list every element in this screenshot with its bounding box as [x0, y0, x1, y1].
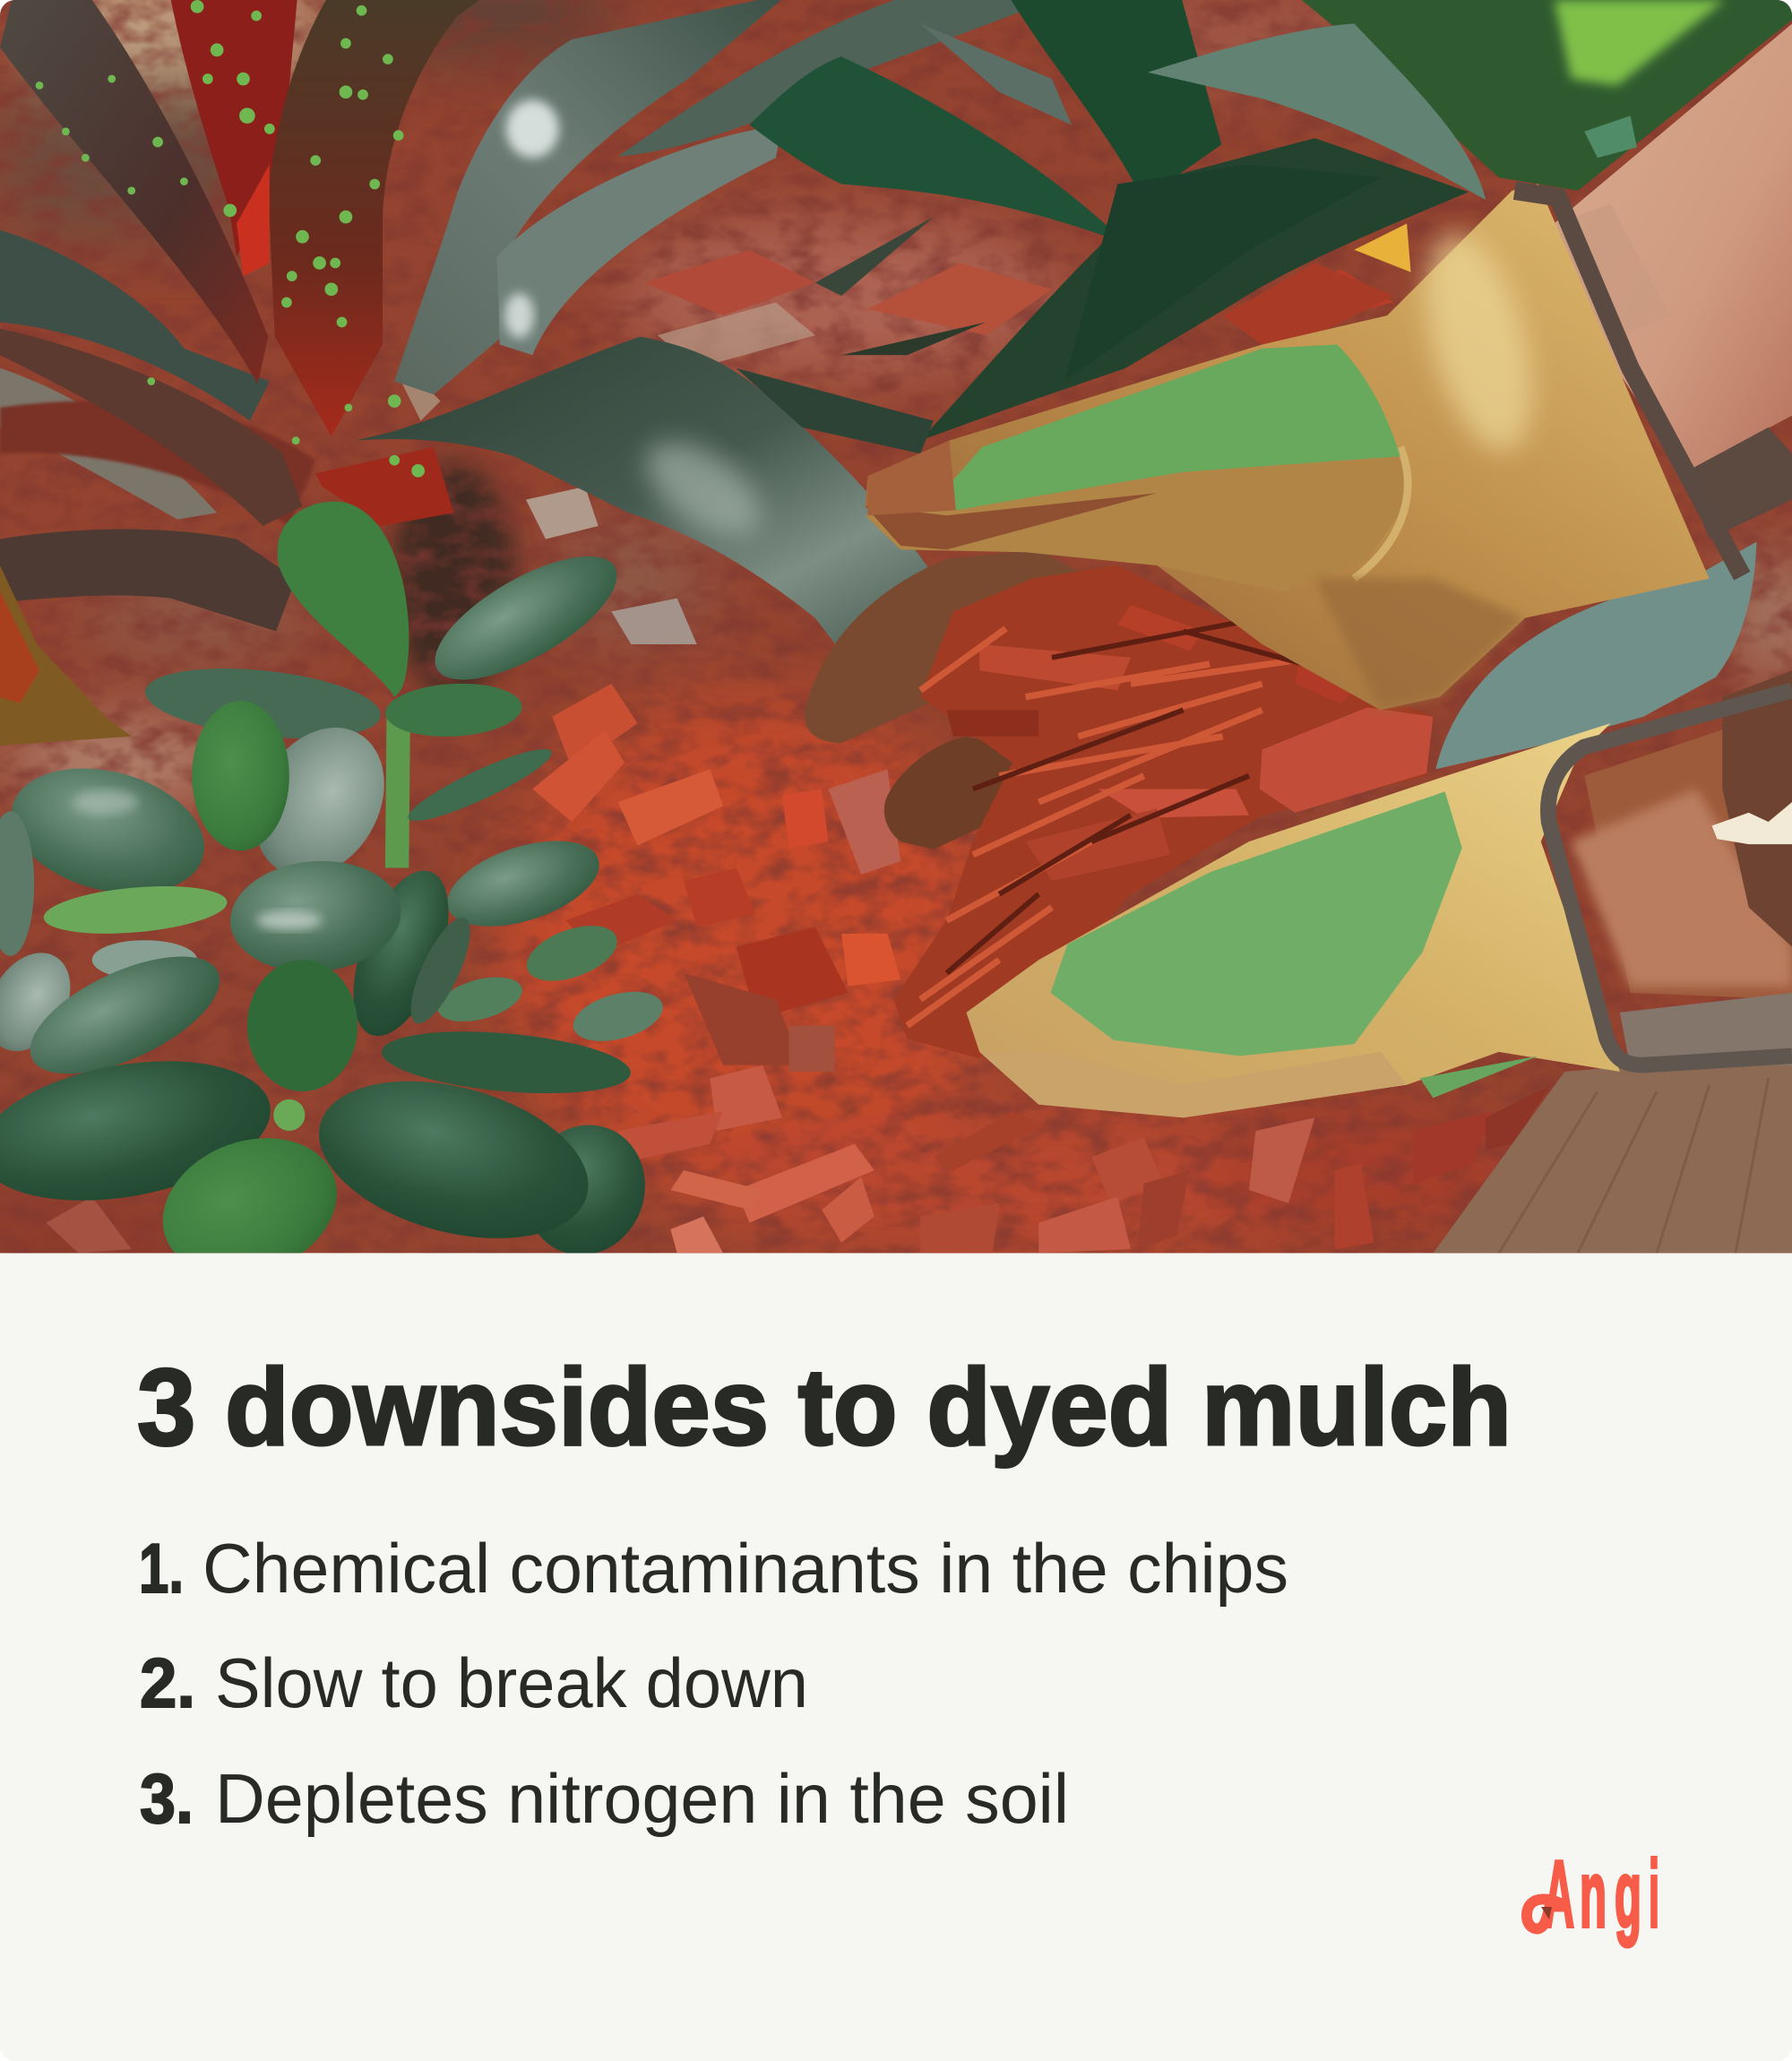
- bromeliad plant: [0, 0, 788, 746]
- lower glove green panel: [1050, 791, 1462, 1056]
- forearm: [1554, 23, 1792, 539]
- Angi logo: n: [1580, 1841, 1607, 1947]
- lower glove leather cuff: [1548, 670, 1792, 1068]
- Angi logo: g: [1615, 1841, 1641, 1947]
- mulch chips: [46, 217, 1552, 1253]
- blue-green leaf behind the hands: [1435, 542, 1756, 769]
- list item 1: 1.: [139, 1529, 184, 1608]
- list item 1: Chemical contaminants in the chips: [202, 1529, 1288, 1608]
- large foreground leaf: [355, 337, 936, 652]
- photo: gloved hands holding red dyed mulch beside plants: [0, 0, 1792, 1302]
- list item 2: Slow to break down: [215, 1643, 808, 1722]
- upper right foliage: [618, 0, 1792, 441]
- mulch ground: [0, 0, 1792, 1302]
- Angi logo: [1527, 1841, 1659, 1947]
- wooden plank: [1433, 1052, 1792, 1253]
- jade plant: [0, 502, 668, 1299]
- list item 3: 3.: [140, 1759, 194, 1838]
- upper glove: [866, 184, 1710, 710]
- lower glove: [967, 723, 1620, 1117]
- handful of red mulch: [894, 565, 1433, 1058]
- list item 2: 2.: [140, 1643, 195, 1722]
- upper glove green panel: [953, 344, 1400, 510]
- bromeliad green speckles: [36, 0, 425, 478]
- upper glove cuff trim: [1514, 191, 1742, 576]
- infographic canvas: i: [1649, 1841, 1659, 1947]
- page background: [0, 1253, 1792, 2061]
- title: 3 downsides to dyed mulch: [137, 1346, 1512, 1468]
- holding fingers: [805, 549, 1091, 849]
- list item 3: Depletes nitrogen in the soil: [215, 1759, 1069, 1838]
- Angi logo: A: [1544, 1841, 1574, 1947]
